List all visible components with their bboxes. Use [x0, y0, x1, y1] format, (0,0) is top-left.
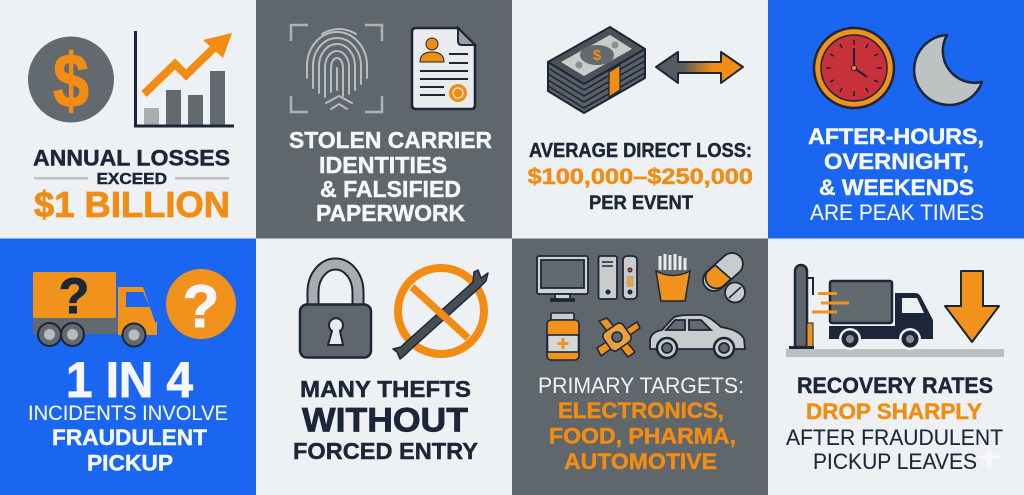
text: incidents involve fraudulent pickup: FRAUDULENT — [52, 425, 208, 450]
icon: truck with question mark — [33, 268, 157, 346]
icon: automotive part and wrench — [597, 318, 640, 357]
heading: after-hours peak times: & WEEKENDS — [819, 175, 974, 200]
icon: truck with question mark: ? — [59, 268, 89, 324]
heading: stolen carrier identities — [289, 127, 492, 226]
text: primary targets list: FOOD, PHARMA, — [549, 424, 736, 448]
text: recovery rates drop sharply: RECOVERY RATES — [797, 373, 993, 398]
icon: crossed-out crowbar — [393, 268, 488, 359]
heading: after-hours peak times: AFTER-HOURS, — [808, 124, 984, 149]
icon: clock — [814, 28, 894, 108]
heading: annual losses: ANNUAL LOSSES — [33, 146, 230, 170]
heading: many thefts without forced entry: WITHOUT — [302, 402, 468, 440]
text: incidents involve fraudulent pickup: INCIDENTS INVOLVE — [28, 402, 228, 425]
text: recovery rates drop sharply: DROP SHARPLY — [806, 399, 982, 424]
icon: stack of cash — [548, 27, 645, 113]
heading: stolen carrier identities: PAPERWORK — [316, 200, 465, 226]
icon: loading dock and departing truck — [786, 265, 1004, 357]
icon: question circle: ? — [183, 273, 219, 340]
panel: primary targets — [512, 238, 768, 495]
text: primary targets list: PRIMARY TARGETS: — [538, 373, 744, 398]
icon: falsified document — [412, 28, 475, 109]
stat: loss range: $100,000–$250,000 — [528, 164, 753, 189]
heading: stolen carrier identities: IDENTITIES — [319, 152, 447, 178]
panel: average direct loss — [512, 0, 768, 238]
text: primary targets list: ELECTRONICS, — [558, 398, 724, 423]
heading: stolen carrier identities: STOLEN CARRIER — [289, 127, 492, 153]
icon: capsule and tablet — [699, 248, 747, 302]
heading: average direct loss: AVERAGE DIRECT LOSS: — [529, 140, 752, 162]
text: per event: PER EVENT — [589, 193, 693, 214]
chart: rising losses — [136, 31, 234, 126]
panel: peak times — [768, 0, 1024, 238]
text: primary targets list: AUTOMOTIVE — [564, 449, 717, 474]
icon: fries — [656, 254, 690, 301]
text: exceed: EXCEED — [96, 171, 167, 188]
icon: computer tower and remote — [598, 256, 637, 299]
icon: dollar coin — [28, 36, 114, 124]
text: primary targets list — [538, 373, 744, 474]
icon: car — [650, 315, 745, 358]
icon: question circle — [166, 269, 236, 340]
heading: many thefts without forced entry — [293, 376, 478, 464]
heading: after-hours peak times: ARE PEAK TIMES — [810, 200, 984, 225]
text: incidents involve fraudulent pickup: PICKUP — [87, 450, 173, 476]
panel: fraudulent pickup — [0, 238, 256, 495]
text: recovery rates drop sharply: PICKUP LEAVES — [813, 449, 977, 474]
icon: down arrow — [945, 271, 999, 342]
text: recovery rates drop sharply: AFTER FRAUDULENT — [786, 425, 1003, 450]
icon: moon — [914, 35, 982, 105]
panel: annual losses — [0, 0, 256, 238]
heading: many thefts without forced entry: MANY THEFTS — [300, 376, 471, 402]
panel: stolen identities — [256, 0, 512, 238]
heading: many thefts without forced entry: FORCED ENTRY — [293, 438, 478, 464]
text: incidents involve fraudulent pickup — [28, 402, 228, 476]
panel: recovery rates — [768, 238, 1024, 495]
icon: fingerprint — [291, 25, 382, 112]
stat: one billion: $1 BILLION — [34, 184, 230, 225]
icon: medicine bottle — [547, 313, 579, 360]
heading: after-hours peak times — [808, 124, 984, 225]
icon: padlock — [300, 264, 371, 358]
icon: monitor — [537, 256, 588, 301]
panel: no forced entry — [256, 238, 512, 495]
stat: 1 in 4: 1 IN 4 — [66, 352, 193, 408]
heading: after-hours peak times: OVERNIGHT, — [824, 149, 969, 174]
icon: dollar coin: $ — [53, 39, 89, 124]
heading: stolen carrier identities: & FALSIFIED — [320, 176, 461, 202]
text: recovery rates drop sharply — [786, 373, 1003, 474]
icon: stack of cash: $ — [593, 47, 602, 64]
icon: double arrow — [656, 52, 743, 83]
